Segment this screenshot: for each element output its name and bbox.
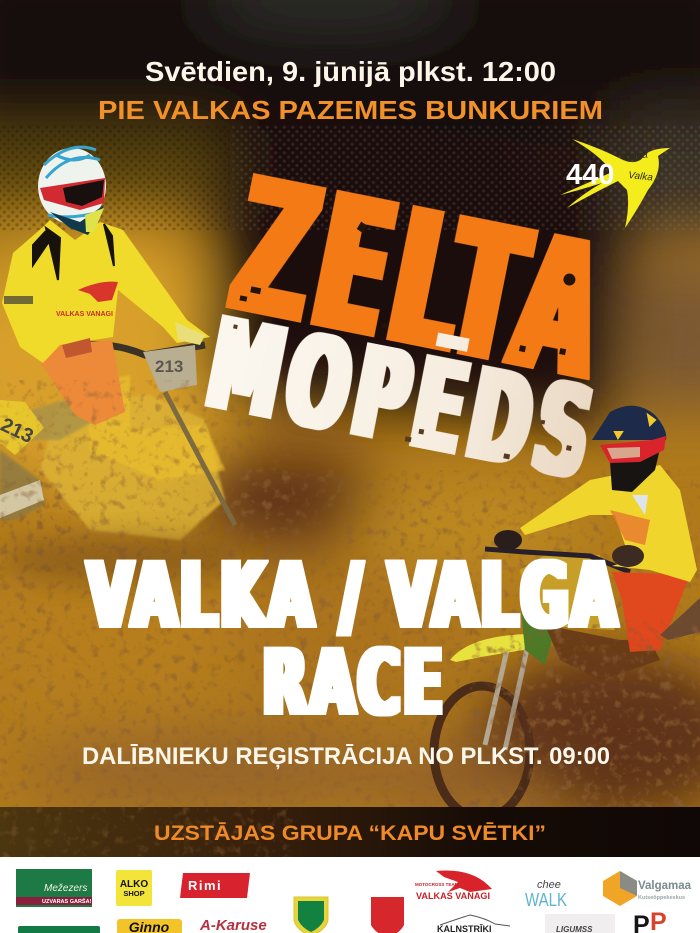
motorbike	[434, 549, 660, 818]
sponsor: Alko Shop: SHOP	[123, 889, 145, 898]
jersey markings	[33, 224, 114, 280]
sponsor: green shield	[294, 897, 328, 933]
orange trousers	[40, 340, 125, 425]
logo: 440 Valga Valka swallow: Valka	[628, 170, 654, 184]
sponsor: Rimi	[180, 873, 250, 898]
dirt spray over riders	[0, 380, 700, 810]
venue: PIE VALKAS PAZEMES BUNKURIEM	[98, 95, 603, 125]
sponsor: Mežezers: UZVARAS GARŠA!	[42, 897, 92, 905]
number plate front	[143, 345, 197, 392]
gloves	[494, 530, 522, 550]
yellow jersey	[520, 465, 697, 582]
sponsor: Rimi: Rimi	[188, 878, 222, 893]
sponsor: Chee Walk: WALK	[525, 890, 567, 910]
faded motorbike: 213	[155, 357, 183, 376]
sponsor: Pixel Point	[633, 908, 667, 933]
sponsors panel	[0, 857, 700, 933]
boot	[660, 598, 700, 640]
band: performing group: UZSTĀJAS GRUPA “KAPU SVĒTKI”	[154, 822, 546, 845]
sponsor: Valgamaa: Kutseõppekeskus	[638, 895, 685, 901]
sponsor: Alko Shop	[116, 870, 152, 906]
sponsor: Mežezers	[16, 869, 92, 907]
logo: 440 Valga Valka swallow: Valga	[622, 149, 649, 163]
sponsor: Chee Walk	[525, 879, 567, 910]
sponsor: green bar	[18, 926, 100, 933]
title: ZELTA	[219, 138, 627, 423]
event name: RACE: RACE	[263, 631, 446, 736]
sponsor: Chee Walk: chee	[537, 879, 561, 891]
registration time: DALĪBNIEKU REĢISTRĀCIJA NO PLKST. 09:00	[82, 743, 610, 770]
sponsor: Valkas Vanagi	[415, 871, 492, 901]
logo: 440 Valga Valka swallow: 440	[566, 159, 614, 191]
rider left: VALKAS VANAGI	[56, 311, 113, 318]
gloves	[62, 338, 92, 358]
number plate side	[0, 400, 44, 455]
yellow jersey	[2, 220, 210, 363]
sponsor: Mežezers: Mežezers	[44, 883, 87, 894]
logo: 440 Valga Valka swallow	[560, 139, 670, 228]
sponsor: Ligums	[545, 914, 615, 933]
helmet	[38, 147, 106, 235]
sponsor: Valgamaa: Valgamaa	[638, 880, 692, 892]
sponsor: Ginno	[117, 919, 182, 933]
sponsor: green shield inner	[298, 901, 324, 932]
date and time: Svētdien, 9. jūnijā plkst. 12:00	[145, 56, 556, 87]
sponsor: Valgamaa	[603, 871, 692, 906]
helmet	[592, 406, 666, 492]
sponsor: Alko Shop: ALKO	[120, 879, 148, 890]
rider right	[434, 406, 700, 818]
sponsor: Kalnstrīki	[437, 915, 510, 933]
faded motorbike	[0, 345, 235, 540]
rider left	[0, 147, 235, 540]
title: MOPĒDS	[197, 290, 610, 509]
sponsor: Valkas Vanagi: VALKAS VANAGI	[416, 891, 490, 901]
sponsor: Valkas Vanagi: MOTOCROSS TEAM	[415, 882, 459, 887]
red trousers	[612, 572, 690, 652]
band: performing group	[0, 807, 700, 857]
sponsor: Valka coat of arms	[371, 897, 404, 933]
